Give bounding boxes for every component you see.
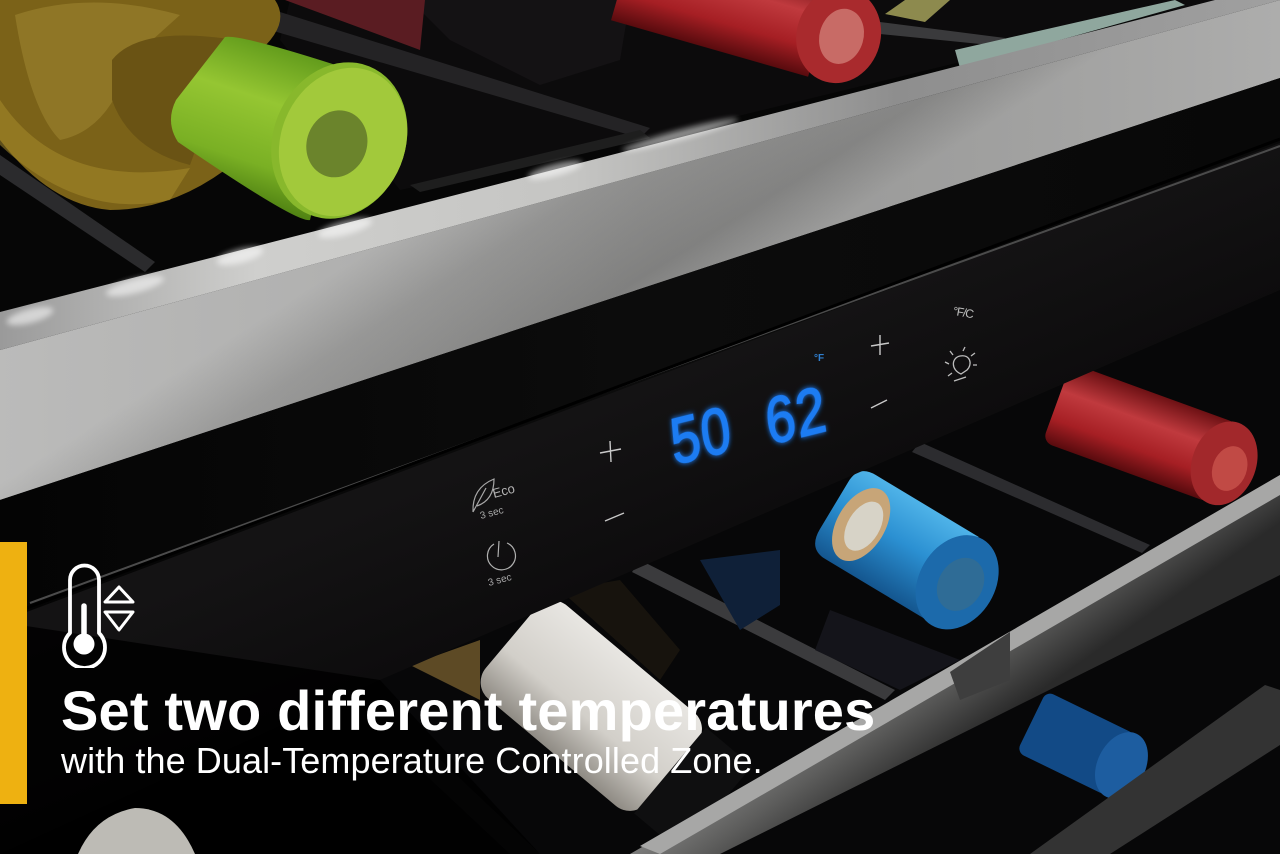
- green capsule: [171, 37, 345, 220]
- eco hold time: 3 sec: [479, 505, 505, 522]
- capsule end face: [248, 42, 430, 239]
- power hold time: 3 sec: [487, 572, 513, 589]
- upper bottle: dark middle: [285, 0, 950, 85]
- icon: minus right: [871, 400, 887, 408]
- unit label: °F: [814, 353, 824, 364]
- icon: light bulb: [945, 347, 977, 381]
- steel handle: upper door bar: [0, 0, 1280, 500]
- background: upper wine rack interior: [0, 0, 1280, 320]
- accent bar: [0, 542, 27, 804]
- eco label: Eco: [491, 481, 516, 501]
- icon: plus left: [600, 441, 621, 462]
- dark bottle behind: [700, 550, 780, 630]
- upper bottle: red capsule: [611, 0, 892, 93]
- lower bottle: small blue capsule: [1016, 690, 1158, 807]
- subtitle: with the Dual-Temperature Controlled Zone.: [61, 740, 763, 781]
- steel handle: lower door bar: [630, 475, 1280, 854]
- unit toggle: °F/C: [952, 304, 975, 321]
- lower wine rack interior: [380, 290, 1280, 854]
- upper bottle: white wine with green capsule: [0, 0, 430, 239]
- bottom-left bottle hint: [78, 808, 195, 854]
- temperature readout left: 50: [666, 392, 736, 479]
- lower bottle: white capsule: [472, 591, 755, 854]
- lower bottle: red capsule: [1042, 362, 1269, 515]
- black glass strip below steel bar: [0, 78, 1280, 622]
- icon: thermometer with up and down arrows: [62, 564, 134, 668]
- upper label glint: [955, 0, 1185, 68]
- icon: power: [487, 541, 515, 570]
- icon: plus right: [871, 335, 889, 355]
- left side shade behind caption: [0, 622, 540, 854]
- icon: eco leaf: [473, 479, 494, 512]
- title: Set two different temperatures: [61, 679, 875, 742]
- bevel highlight: [0, 0, 1280, 350]
- icon: minus left: [605, 513, 624, 521]
- lower bottle: blue capsule: [807, 465, 1015, 645]
- temperature readout right: 62: [761, 372, 831, 459]
- bottle shoulder gold glass: [0, 0, 280, 210]
